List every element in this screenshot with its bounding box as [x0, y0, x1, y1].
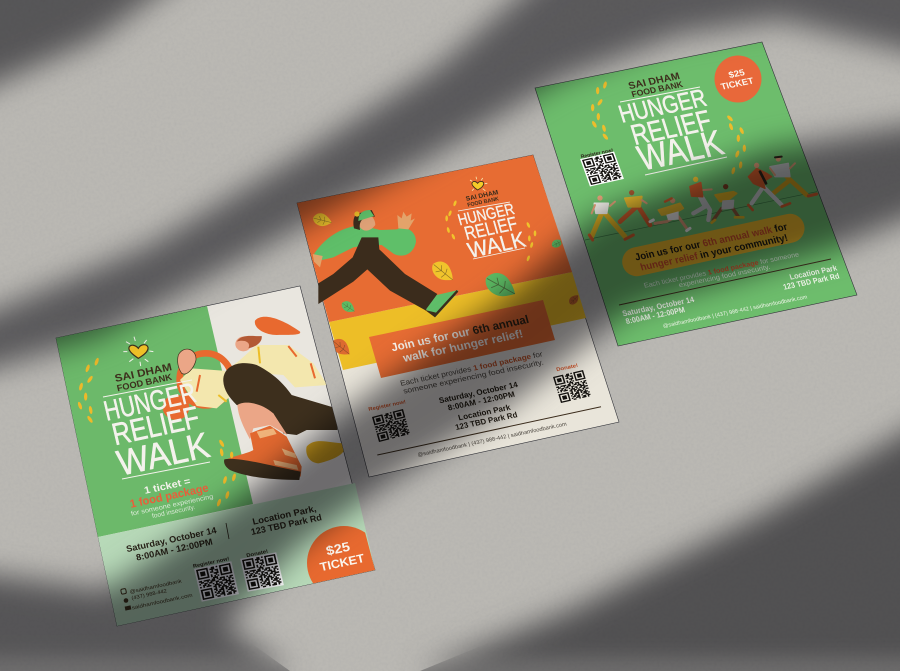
date, location and contact: [621, 263, 841, 330]
organiser name: SAI DHAM: [465, 189, 499, 203]
title: Hunger Relief Walk: WALK: [632, 122, 728, 178]
title: Hunger Relief Walk: HUNGER: [101, 377, 199, 427]
footprints: [77, 357, 237, 507]
date and location: 8:00AM - 12:00PM: [135, 537, 214, 563]
QR codes with captions: Donate!: [556, 363, 579, 373]
date, location and contact: 8:00AM - 12:00PM: [625, 305, 686, 326]
contact details: (437) 988-442: [131, 588, 168, 602]
title: Hunger Relief Walk: [615, 84, 728, 178]
food package blurb: experiencing food insecurity.: [678, 264, 771, 289]
date and location: 8:00AM - 12:00PM: [447, 390, 516, 412]
orange ticket badge: TICKET: [719, 75, 755, 92]
QR codes with captions: Register now!: [192, 556, 230, 570]
poster: left flyer: [56, 286, 381, 626]
footer rule and contact line: @saidhamfoodbank | (437) 988-442 | saidhamfoodbank.com: [417, 421, 568, 459]
QR code with caption: [580, 148, 624, 187]
contact details: saidhamfoodbank.com: [131, 593, 193, 611]
ticket equals food package: for someone experiencing: [130, 493, 214, 518]
food package blurb: someone experiencing food insecurity.: [402, 358, 545, 396]
QR code with caption: Register now!: [580, 148, 615, 160]
food package blurb: Each ticket provides 1 food package for someone: [643, 251, 800, 290]
ticket price: $25: [325, 539, 351, 558]
mint footer panel: [98, 483, 375, 626]
ticket equals food package: 1 food package: [129, 482, 210, 511]
poster base: [56, 286, 375, 626]
ticket equals food package: 1 ticket =: [143, 476, 192, 497]
orange ticket badge: [714, 56, 762, 102]
ticket equals food package: food insecurity.: [151, 504, 196, 520]
food package blurb: Each ticket provides 1 food package for: [399, 349, 544, 388]
date and location: [438, 380, 519, 432]
callout: yellow pill: Join us for our 6th annual walk for: [634, 222, 789, 263]
logo: heart with rays: [123, 337, 153, 366]
poster base: [297, 155, 619, 477]
title: Hunger Relief Walk: RELIEF: [627, 105, 715, 152]
organiser name: SAI DHAM: [627, 71, 681, 92]
footer rule and contact line: [377, 407, 601, 459]
date and location: 123 TBD Park Rd: [454, 410, 519, 432]
ticket price: [318, 539, 366, 574]
contact details: [121, 578, 193, 611]
title: Hunger Relief Walk: HUNGER: [456, 201, 517, 229]
callout: join us banner: Join us for our 6th annual: [390, 314, 530, 354]
poster base: [535, 42, 857, 346]
leaves: [312, 212, 581, 359]
title: Hunger Relief Walk: HUNGER: [615, 84, 710, 129]
orange field: [297, 155, 572, 322]
illustration: walker in overalls: [313, 210, 458, 317]
organiser name: FOOD BANK: [116, 372, 173, 393]
footprints: [591, 81, 746, 175]
ticket equals food package: [129, 476, 214, 520]
date and location: Saturday, October 14: [125, 525, 217, 554]
poster: centre flyer: [297, 155, 619, 477]
date, location and contact: 123 TBD Park Rd: [782, 272, 841, 292]
date, location and contact: Saturday, October 14: [621, 295, 696, 318]
contact details: @saidhamfoodbank: [129, 578, 183, 595]
title: Hunger Relief Walk: [101, 377, 213, 484]
callout: yellow pill: hunger relief in your community!: [639, 233, 789, 273]
footprints: [445, 200, 536, 262]
organiser name: [627, 71, 685, 99]
yellow band: [329, 272, 586, 370]
organiser name: [465, 189, 500, 209]
organiser name: SAI DHAM: [114, 362, 173, 385]
illustration: group of runners: [585, 156, 817, 240]
date and location: Saturday, October 14: [438, 380, 519, 405]
organiser name: [114, 362, 173, 393]
date, location and contact: @saidhamfoodbank | (437) 988-442 | saidhamfoodbank.com: [662, 294, 809, 330]
title: Hunger Relief Walk: RELIEF: [462, 214, 520, 245]
ticket price: TICKET: [318, 551, 366, 574]
title: Hunger Relief Walk: RELIEF: [109, 400, 203, 452]
title: Hunger Relief Walk: WALK: [465, 227, 529, 263]
date and location: 123 TBD Park Rd: [250, 512, 323, 537]
organiser name: FOOD BANK: [630, 79, 685, 99]
callout: join us banner: walk for hunger relief!: [401, 328, 525, 365]
logo: heart with rays: [470, 177, 487, 191]
QR codes with captions: Register now!: [368, 399, 407, 413]
QR codes with captions: [368, 363, 591, 441]
organiser name: FOOD BANK: [467, 196, 500, 209]
orange ticket badge: $25: [727, 67, 746, 80]
rule: [619, 259, 831, 305]
date, location and contact: Location Park: [788, 263, 839, 282]
date and location: Location Park,: [251, 503, 317, 527]
green panel: [56, 306, 253, 537]
title: Hunger Relief Walk: WALK: [113, 424, 213, 484]
orange ticket badge: [307, 526, 375, 584]
QR codes with captions: Donate!: [246, 549, 269, 559]
title: Hunger Relief Walk: [456, 201, 529, 263]
date and location: Location Park: [457, 403, 512, 422]
illustration: runner: [163, 317, 345, 480]
callout: join us banner: [369, 300, 555, 378]
poster: right flyer: [535, 42, 857, 346]
QR codes with captions: [192, 549, 284, 602]
date and location: [125, 503, 323, 563]
